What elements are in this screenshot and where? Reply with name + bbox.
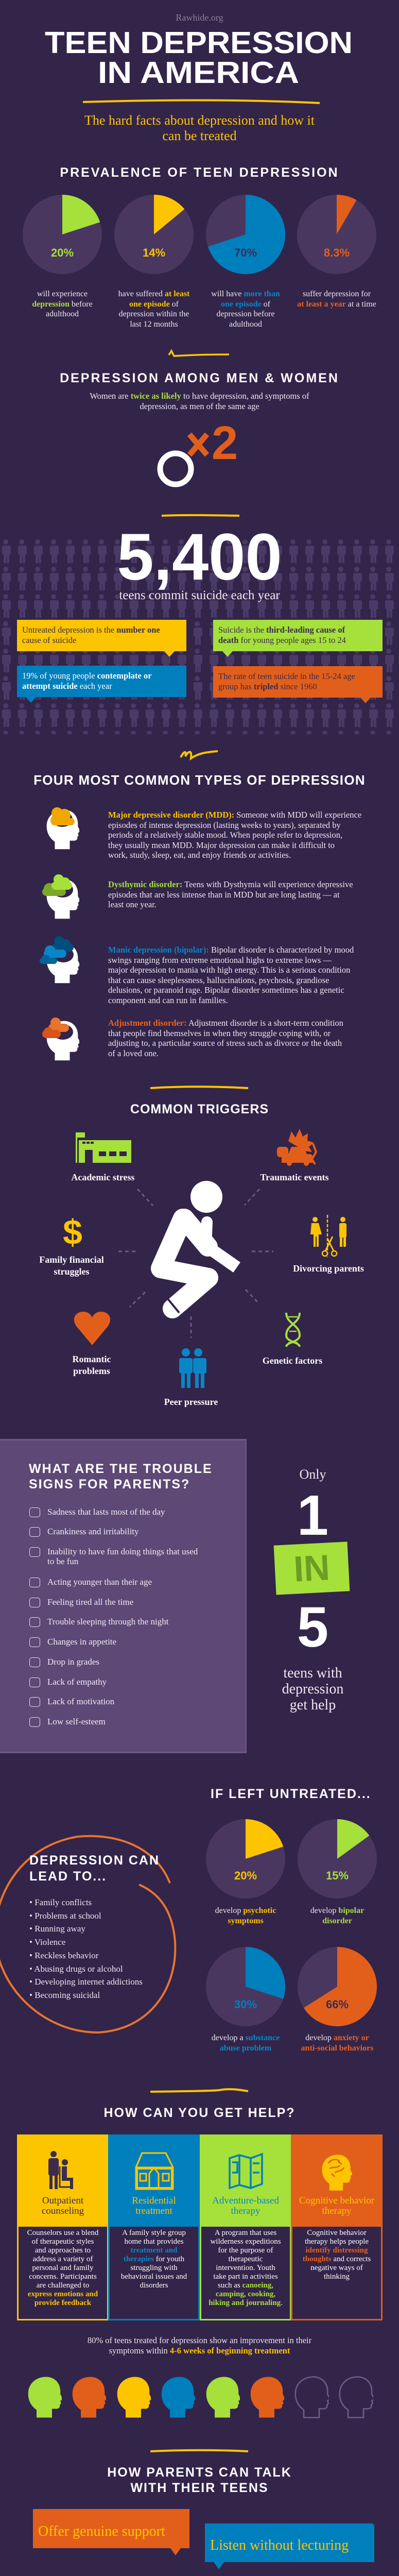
icon: heart bbox=[74, 1312, 110, 1345]
text: dysthymic: Dysthymic disorder: Teens with Dysthymia will experience depressive bbox=[108, 879, 353, 889]
checklist items: Low self-esteem bbox=[47, 1717, 106, 1726]
list: consequences: • Problems at school bbox=[29, 1911, 101, 1921]
callout: number one cause: cause of suicide bbox=[22, 635, 76, 645]
callout: tripled: The rate of teen suicide in the 15-24 age bbox=[218, 671, 355, 681]
text: bipolar bbox=[108, 945, 354, 1005]
caption 4: suffer depression for bbox=[303, 290, 371, 298]
label: genetic factors: Genetic factors bbox=[263, 1355, 322, 1366]
subtitle bbox=[84, 113, 315, 143]
panel: outpatient counseling: personal and family bbox=[32, 2264, 94, 2272]
heading: how can you get help: HOW CAN YOU GET HELP? bbox=[103, 2106, 296, 2120]
stat: only 1 in 5: teens with bbox=[283, 1665, 342, 1681]
checklist items: Inability to have fun doing things that used bbox=[47, 1547, 198, 1556]
captions: untreated: symptoms bbox=[228, 1917, 264, 1925]
decorative orange circle bbox=[0, 1835, 176, 2033]
captions: untreated: develop psychotic bbox=[215, 1906, 276, 1915]
panel: adventure-based therapy: such as canoeing, bbox=[218, 2281, 273, 2290]
stat: only 1 in 5: depression bbox=[282, 1681, 343, 1697]
bubble: listen without lecturing: Listen without lecturing bbox=[210, 2537, 349, 2553]
panel: residential treatment: Residential bbox=[132, 2195, 176, 2206]
icon: brain head bbox=[322, 2155, 352, 2191]
panel: cognitive behavior therapy: negative ways of bbox=[310, 2264, 363, 2272]
heading: depression can lead to bbox=[29, 1853, 160, 1884]
label: peer pressure: Peer pressure bbox=[164, 1397, 218, 1407]
caption 3: one episode of bbox=[221, 300, 270, 308]
text: bipolar: Manic depression (bipolar): Bipolar disorder is characterized by mood bbox=[108, 945, 354, 955]
checklist items: Lack of motivation bbox=[47, 1697, 114, 1706]
pie 14%: 14% bbox=[143, 246, 165, 259]
caption 1: will experience bbox=[37, 290, 88, 298]
text: bipolar: delusions, or paranoid rage. Bipolar disorder sometimes has a genetic bbox=[108, 985, 344, 995]
panel: residential treatment: A family style group bbox=[122, 2229, 186, 2237]
label: divorcing parents: Divorcing parents bbox=[293, 1263, 364, 1274]
captions: untreated: develop a substance bbox=[212, 2033, 280, 2042]
pie 70%: 70% bbox=[234, 246, 257, 259]
callout: number one cause: Untreated depression is the number one bbox=[22, 625, 160, 635]
list: consequences bbox=[29, 1897, 143, 2000]
callout: 19% contemplate: attempt suicide each year bbox=[22, 681, 112, 691]
bubble: offer genuine support bbox=[33, 2509, 189, 2555]
caption 2: one episode of bbox=[129, 300, 179, 308]
text: bipolar: component and can run in families. bbox=[108, 995, 228, 1005]
decorative squiggle bbox=[180, 750, 218, 760]
panel: cognitive behavior therapy: therapy bbox=[322, 2205, 351, 2216]
pie 14% bbox=[114, 195, 194, 274]
panel: cognitive behavior therapy: therapy helps people bbox=[305, 2238, 369, 2246]
panel: residential treatment: disorders bbox=[140, 2281, 168, 2290]
caption 1: adulthood bbox=[46, 310, 79, 318]
decorative brush line bbox=[150, 2088, 248, 2093]
caption 1 bbox=[32, 290, 93, 318]
decorative brush line bbox=[147, 2445, 252, 2456]
label: family financial struggles: Family financial bbox=[39, 1255, 104, 1265]
text: adjustment bbox=[108, 1018, 343, 1058]
panel: adventure-based therapy bbox=[200, 2134, 291, 2320]
pie 20% bbox=[23, 195, 102, 274]
caption 4 bbox=[297, 290, 376, 308]
icon: counselor bbox=[48, 2151, 73, 2189]
dashed connectors bbox=[118, 1189, 273, 1338]
triggers diagram: problems bbox=[73, 1366, 110, 1376]
callout: third-leading cause: Suicide is the third-leading cause of bbox=[218, 625, 345, 635]
checklist items: Drop in grades bbox=[47, 1657, 99, 1667]
panel: adventure-based therapy: intervention. Youth bbox=[216, 2264, 275, 2272]
panel: cognitive behavior therapy bbox=[291, 2134, 383, 2320]
text: teens commit suicide: teens commit suicide each year bbox=[119, 588, 280, 602]
pie 30% substance bbox=[206, 1947, 285, 2026]
caption 2 bbox=[118, 290, 189, 329]
pie 15% bipolar: 15% bbox=[326, 1869, 349, 1882]
captions: untreated bbox=[212, 1906, 374, 2053]
panel: residential treatment bbox=[108, 2134, 200, 2320]
captions: untreated: develop anxiety or bbox=[305, 2033, 369, 2042]
callout: third-leading cause bbox=[213, 620, 383, 651]
list: consequences: • Developing internet addictions bbox=[29, 1977, 143, 1987]
heading: prevalence: PREVALENCE OF TEEN DEPRESSION bbox=[60, 165, 339, 180]
checklist items: Feeling tired all the time bbox=[47, 1597, 133, 1607]
panel: residential treatment: behavioral issues and bbox=[121, 2273, 187, 2281]
icon: house bbox=[135, 2153, 174, 2190]
panel: residential treatment: treatment and bbox=[131, 2246, 177, 2255]
panel: trouble signs checklist bbox=[0, 1439, 247, 1753]
stat: only 1 in 5 bbox=[274, 1467, 350, 1713]
panel: adventure-based therapy: therapeutic bbox=[229, 2255, 263, 2263]
caption 4: at least a year at a time bbox=[297, 300, 376, 308]
panel: cognitive behavior therapy: thoughts and corrects bbox=[303, 2255, 371, 2263]
heading: four types: FOUR MOST COMMON TYPES OF DEPRESSION bbox=[33, 772, 366, 788]
pie 30% substance: 30% bbox=[234, 1998, 257, 2011]
decorative squiggle bbox=[168, 349, 229, 357]
people pattern background bbox=[2, 539, 394, 734]
pie 15% bipolar bbox=[298, 1819, 377, 1899]
text: dysthymic: episodes that are less intense than in MDD but are long lasting — at bbox=[108, 889, 340, 900]
icon: school bbox=[76, 1132, 131, 1163]
panel: outpatient counseling: counseling bbox=[42, 2205, 84, 2216]
panel: residential treatment: treatment bbox=[135, 2205, 172, 2216]
text: adjustment: of a loved one. bbox=[108, 1048, 159, 1058]
text: adjustment: Adjustment disorder: Adjustment disorder is a short-term condition bbox=[108, 1018, 343, 1028]
panel: adventure-based therapy: Adventure-based bbox=[212, 2195, 279, 2206]
text: 80% improvement bbox=[88, 2335, 311, 2355]
stat: only 1 in 5: get help bbox=[290, 1697, 336, 1713]
checklist items: to be fun bbox=[47, 1556, 78, 1566]
pie 20%: 20% bbox=[51, 246, 74, 259]
pie charts: untreated bbox=[206, 1819, 377, 2026]
source label: Rawhide.org bbox=[176, 12, 223, 23]
icon: bipolar head bbox=[40, 936, 79, 983]
pie 66% anxiety: 66% bbox=[326, 1998, 349, 2011]
callout: tripled bbox=[213, 666, 383, 698]
text: MDD: work, study, sleep, eat, and enjoy friends or activities. bbox=[108, 850, 291, 860]
pie 66% anxiety bbox=[298, 1947, 377, 2026]
text: dysthymic bbox=[108, 879, 353, 909]
list: consequences: • Becoming suicidal bbox=[29, 1990, 100, 2000]
caption 2: depression within the bbox=[119, 310, 189, 318]
heading: depression can lead to: LEAD TO... bbox=[29, 1869, 107, 1884]
title: TEEN DEPRESSION bbox=[45, 26, 353, 60]
text: women twice as likely bbox=[90, 391, 309, 411]
panel: outpatient counseling: Counselors use a blend bbox=[27, 2229, 98, 2237]
text: MDD bbox=[108, 810, 361, 860]
bubble: offer genuine support: Offer genuine support bbox=[38, 2523, 165, 2539]
panel: outpatient counseling: address a variety of bbox=[32, 2255, 93, 2263]
subtitle: The hard facts about depression and how it bbox=[84, 113, 315, 128]
pie 8.3% bbox=[297, 195, 376, 274]
pie 8.3%: 8.3% bbox=[324, 246, 350, 259]
icon: DNA bbox=[286, 1313, 300, 1347]
heading: how parents can talk: HOW PARENTS CAN TALK bbox=[107, 2465, 292, 2480]
text: dysthymic: least one year. bbox=[108, 900, 157, 909]
list: consequences: • Violence bbox=[29, 1937, 65, 1947]
heading: if left untreated: IF LEFT UNTREATED... bbox=[211, 1787, 371, 1801]
captions: untreated: develop bipolar bbox=[310, 1906, 364, 1915]
checklist items: Crankiness and irritability bbox=[47, 1527, 139, 1536]
checklist items: Lack of empathy bbox=[47, 1677, 107, 1687]
label: traumatic events: Traumatic events bbox=[260, 1172, 329, 1182]
caption 3 bbox=[211, 290, 280, 329]
decorative brush line bbox=[150, 1086, 248, 1089]
panel: residential treatment: therapies for youth bbox=[124, 2255, 184, 2263]
pie 70% bbox=[206, 195, 285, 274]
heading: depression can lead to: DEPRESSION CAN bbox=[29, 1853, 160, 1868]
callout: 19% contemplate: 19% of young people contemplate or bbox=[22, 671, 152, 681]
text: 80% improvement: symptoms within 4-6 weeks of beginning treatment bbox=[109, 2345, 290, 2355]
icon: female symbol times two bbox=[158, 420, 238, 487]
panel: residential treatment: home that provides bbox=[125, 2238, 183, 2246]
bubble: listen without lecturing bbox=[205, 2523, 374, 2569]
panel: adventure-based therapy: for the purpose of bbox=[218, 2246, 273, 2255]
panel: outpatient counseling: of therapeutic styles bbox=[32, 2238, 94, 2246]
panel: adventure-based therapy: wilderness expeditions bbox=[210, 2238, 281, 2246]
icon: crouching person bbox=[161, 1181, 237, 1313]
heading: trouble signs: WHAT ARE THE TROUBLE bbox=[29, 1462, 213, 1476]
panel: adventure-based therapy: A program that uses bbox=[215, 2229, 276, 2237]
stat: only 1 in 5: IN bbox=[293, 1547, 331, 1589]
panel: adventure-based therapy: take part in activities bbox=[213, 2273, 278, 2281]
caption 2: last 12 months bbox=[130, 319, 178, 329]
list: consequences: • Family conflicts bbox=[29, 1897, 92, 1907]
stat: only 1 in 5: 1 bbox=[297, 1484, 328, 1547]
text: women twice as likely: depression, as men of the same age bbox=[140, 401, 259, 411]
list: consequences: • Running away bbox=[29, 1924, 85, 1934]
callout: 19% contemplate bbox=[17, 666, 186, 697]
captions: untreated: disorder bbox=[322, 1917, 352, 1925]
panel: adventure-based therapy: camping, cooking, bbox=[216, 2290, 275, 2298]
big number 5,400: 5,400 bbox=[117, 520, 282, 594]
checklist items: Changes in appetite bbox=[47, 1637, 116, 1647]
panel: cognitive behavior therapy: thinking bbox=[324, 2273, 350, 2281]
captions: untreated: anti-social behaviors bbox=[301, 2043, 373, 2053]
checklist items: Trouble sleeping through the night bbox=[47, 1617, 168, 1626]
triggers diagram: struggles bbox=[54, 1266, 90, 1277]
stat: only 1 in 5: 5 bbox=[297, 1596, 328, 1659]
caption 3: depression before bbox=[216, 310, 275, 318]
heading: how parents can talk bbox=[0, 2465, 399, 2496]
panel: adventure-based therapy: therapy bbox=[231, 2205, 260, 2216]
label: romantic problems: Romantic bbox=[72, 1354, 111, 1364]
pie charts: prevalence bbox=[23, 195, 376, 274]
checklist items bbox=[29, 1507, 198, 1727]
panel: outpatient counseling: concerns. Participants bbox=[29, 2273, 97, 2281]
title bbox=[45, 26, 353, 88]
caption 2: have suffered at least bbox=[118, 290, 189, 298]
heading: men and women: DEPRESSION AMONG MEN & WOMEN bbox=[60, 371, 339, 385]
list: consequences: • Abusing drugs or alcohol bbox=[29, 1964, 123, 1974]
icon: MDD head bbox=[46, 807, 79, 849]
panel: residential treatment: struggling with bbox=[130, 2264, 178, 2272]
panel: outpatient counseling: are challenged to bbox=[37, 2281, 89, 2290]
callout: third-leading cause: death for young people ages 15 to 24 bbox=[218, 635, 346, 645]
triggers diagram bbox=[39, 1129, 364, 1407]
panel: adventure-based therapy: hiking and journaling. bbox=[209, 2299, 283, 2307]
pie 20% psychotic bbox=[206, 1819, 285, 1899]
text: bipolar: swings ranging from extreme emotional highs to extreme lows — bbox=[108, 955, 332, 964]
text: adjustment: that people find themselves in when they struggle coping with, or bbox=[108, 1028, 331, 1038]
panel: outpatient counseling: and approaches to bbox=[35, 2246, 91, 2255]
text: 80% improvement: 80% of teens treated for depression show an improvement in their bbox=[88, 2335, 311, 2345]
text: adjustment: adjusting to, a particular source of stress such as divorce or the death bbox=[108, 1038, 342, 1048]
heading: trouble signs bbox=[29, 1462, 213, 1492]
captions: untreated: abuse problem bbox=[220, 2043, 271, 2053]
text: bipolar: that can cause sleeplessness, hallucinations, psychosis, grandiose bbox=[108, 975, 329, 985]
label: academic stress: Academic stress bbox=[71, 1172, 135, 1182]
heading: common triggers: COMMON TRIGGERS bbox=[130, 1102, 269, 1116]
decorative brush line bbox=[162, 514, 240, 517]
icon: adjustment head bbox=[42, 1018, 79, 1060]
list: consequences: • Reckless behavior bbox=[29, 1951, 98, 1960]
panel: cognitive behavior therapy: Cognitive behavior bbox=[299, 2195, 374, 2206]
pie 20% psychotic: 20% bbox=[234, 1869, 257, 1882]
icon row: 8 heads bbox=[28, 2376, 373, 2418]
callout: number one cause bbox=[17, 620, 186, 651]
panel: outpatient counseling bbox=[17, 2134, 109, 2320]
subtitle: can be treated bbox=[162, 128, 237, 143]
text: bipolar: major depression to mania with high energy. This is a serious condition bbox=[108, 965, 350, 975]
caption 3: adulthood bbox=[229, 319, 262, 329]
icon: peer pressure bbox=[179, 1348, 206, 1388]
decorative brush line bbox=[82, 99, 320, 104]
checklist items: Acting younger than their age bbox=[47, 1577, 152, 1587]
pie captions bbox=[32, 290, 376, 329]
panel: cognitive behavior therapy: identify distressing bbox=[306, 2246, 368, 2255]
callout: tripled: group has tripled since 1960 bbox=[218, 682, 317, 691]
text: MDD: episodes of intense depression (lasting weeks to years), separated by bbox=[108, 820, 341, 829]
icon: divorce bbox=[310, 1215, 346, 1257]
text: MDD: Major depressive disorder (MDD): Someone with MDD will experience bbox=[108, 810, 361, 820]
panel: outpatient counseling: express emotions and bbox=[28, 2290, 98, 2298]
panel: outpatient counseling: provide feedback bbox=[34, 2299, 91, 2307]
text: MDD: they usually mean MDD. Major depression can make it difficult to bbox=[108, 840, 335, 850]
panel: cognitive behavior therapy: Cognitive behavior bbox=[307, 2229, 367, 2237]
panel: outpatient counseling: Outpatient bbox=[42, 2195, 83, 2206]
stat: only 1 in 5: Only bbox=[300, 1467, 326, 1482]
text: women twice as likely: Women are twice as likely to have depression, and symptoms of bbox=[90, 391, 309, 401]
heading: how parents can talk: WITH THEIR TEENS bbox=[130, 2481, 269, 2495]
caption 1: depression before bbox=[32, 300, 93, 308]
checklist items: Sadness that lasts most of the day bbox=[47, 1507, 165, 1517]
icon: dollar: $ bbox=[63, 1213, 82, 1252]
heading: trouble signs: SIGNS FOR PARENTS? bbox=[29, 1477, 190, 1492]
caption 3: will have more than bbox=[211, 290, 280, 298]
text: MDD: periods of a relatively stable mood. When people refer to depression, bbox=[108, 830, 342, 840]
icon: map bbox=[229, 2153, 263, 2190]
icon: traumatic events bbox=[277, 1129, 316, 1166]
icon: dysthymic head bbox=[42, 874, 79, 919]
